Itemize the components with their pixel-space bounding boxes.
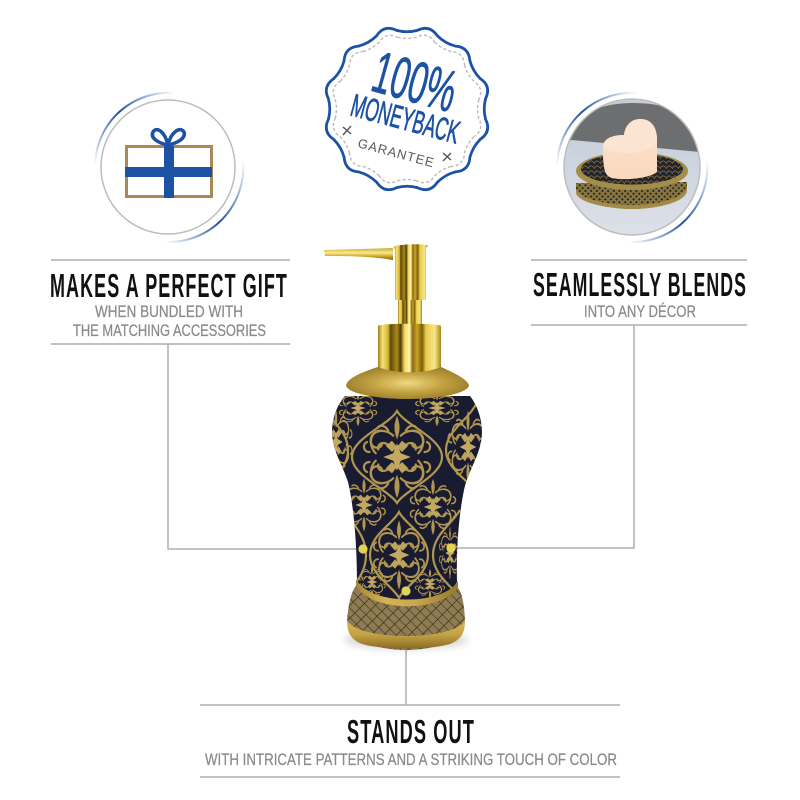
badge crosses	[343, 126, 451, 161]
connector lines	[168, 325, 634, 705]
icon: gift in circle	[95, 93, 243, 242]
body	[332, 396, 482, 602]
subtext: INTO ANY DÉCOR	[584, 302, 696, 321]
badge text: garantee: GARANTEE	[356, 135, 436, 170]
neck ring	[356, 579, 458, 606]
badge: 100% moneyback guarantee	[322, 24, 492, 194]
callout dots	[358, 543, 456, 596]
subtext: THE MATCHING ACCESSORIES	[73, 322, 266, 340]
base shadow	[344, 631, 468, 649]
photo background	[564, 99, 700, 235]
decorative ring arcs	[557, 93, 707, 242]
panel: stands out	[200, 705, 620, 777]
panel: seamlessly blends	[531, 260, 747, 325]
pump head	[394, 244, 428, 300]
photo border	[564, 99, 700, 235]
ribbon	[125, 146, 212, 198]
bow	[152, 130, 184, 145]
subtext: WITH INTRICATE PATTERNS AND A STRIKING TOUCH OF COLOR	[205, 751, 617, 769]
scalloped badge outline	[322, 24, 492, 194]
badge text: moneyback: MONEYBACK	[347, 87, 464, 150]
panel: makes a perfect gift	[50, 260, 290, 344]
pump spout	[324, 248, 393, 260]
pump collar	[378, 324, 441, 373]
dashed inner outline	[329, 31, 485, 187]
gift box	[126, 146, 212, 196]
photo: soap dish in circle	[557, 93, 707, 242]
gift circle	[101, 100, 235, 234]
pump stem	[398, 300, 422, 326]
heart soap	[603, 119, 657, 179]
heading: MAKES A PERFECT GIFT	[50, 267, 288, 304]
product: soap dispenser	[320, 244, 488, 650]
decorative ring arcs	[95, 93, 243, 242]
ornamental pattern	[332, 396, 482, 600]
base	[347, 585, 465, 650]
subtext: WHEN BUNDLED WITH	[95, 303, 243, 321]
badge text: 100%: 100%	[366, 39, 464, 125]
shoulder dome	[346, 367, 469, 399]
soap dish	[576, 152, 688, 209]
heading: STANDS OUT	[347, 713, 475, 750]
base rim	[347, 620, 465, 648]
